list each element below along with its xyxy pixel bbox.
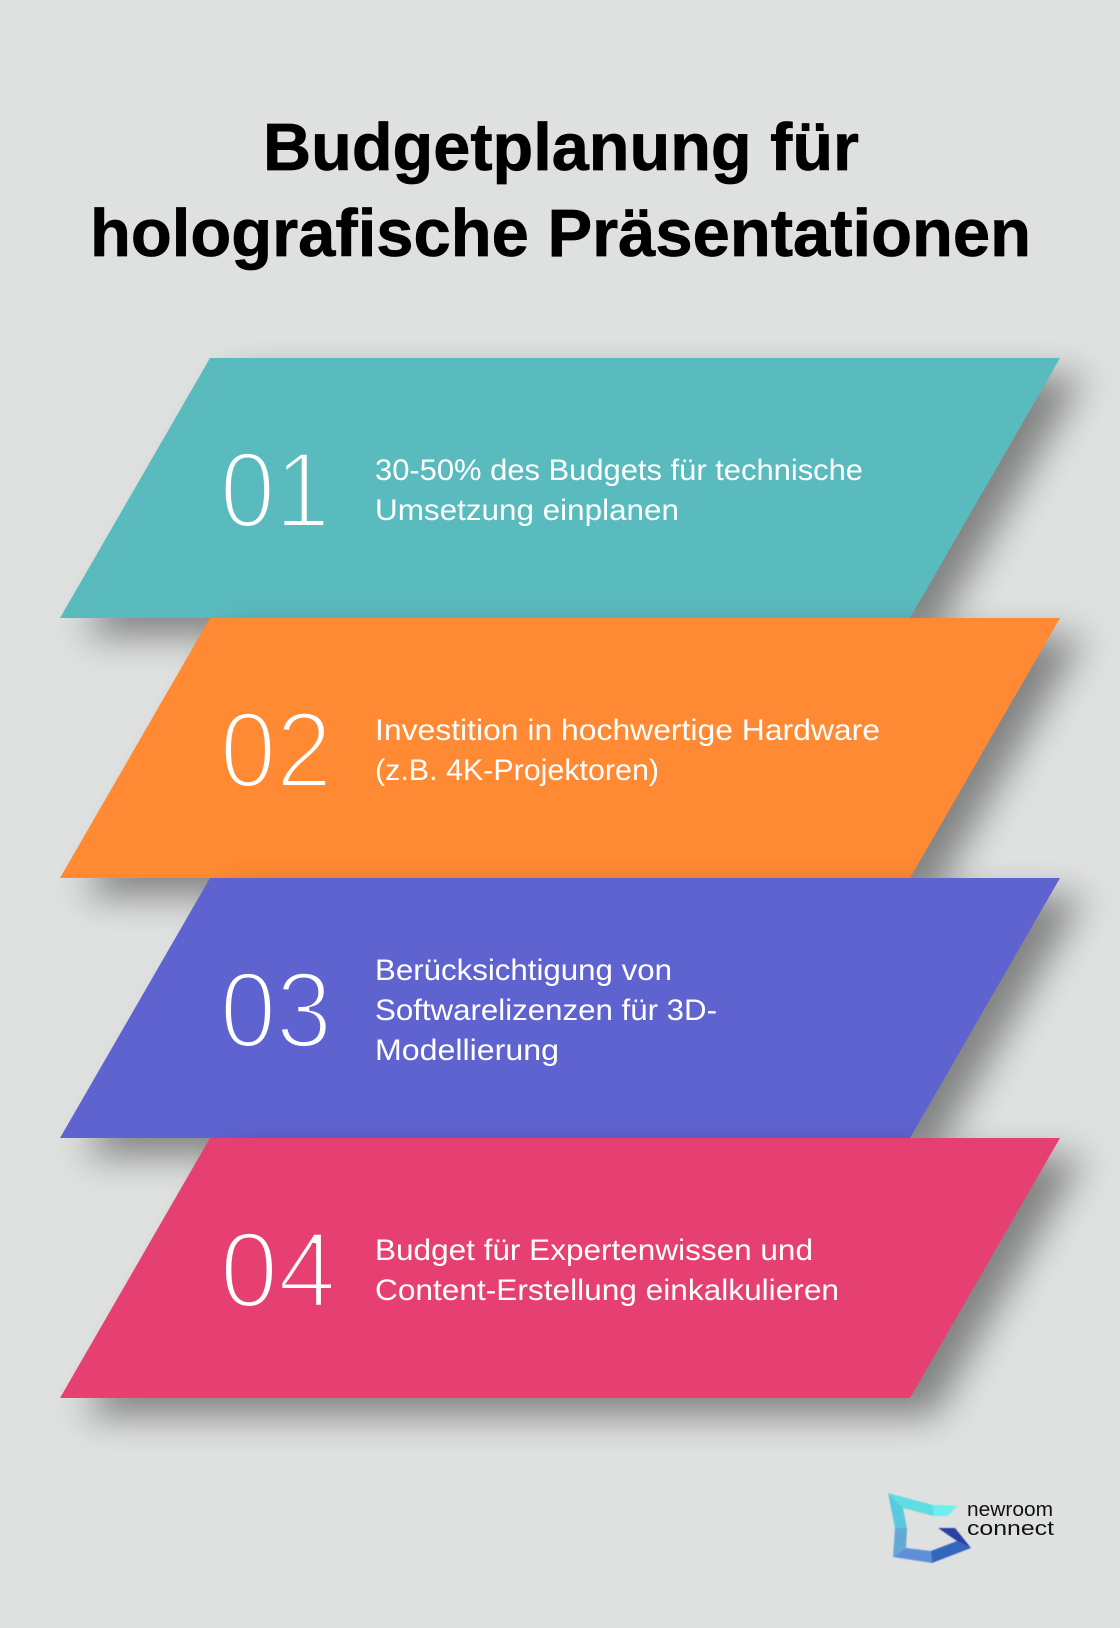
step 01 text: Umsetzung einplanen (375, 494, 679, 527)
logo: newroom connect (888, 1493, 1055, 1563)
icon: logo mark (888, 1493, 971, 1563)
step 02 text (375, 714, 880, 787)
title: holografische Präsentationen (90, 196, 1031, 271)
step 02 text: Investition in hochwertige Hardware (375, 714, 880, 747)
step 04 text: Budget für Expertenwissen und (375, 1234, 813, 1267)
step 04 parallelogram (60, 1138, 1060, 1398)
step 04 text: Content-Erstellung einkalkulieren (375, 1274, 839, 1307)
step 04 text (375, 1234, 839, 1307)
panel: step 01 (60, 358, 1060, 618)
step 02 text: (z.B. 4K-Projektoren) (375, 754, 659, 787)
panel: step 03 (60, 878, 1060, 1138)
step 03 text: Modellierung (375, 1034, 559, 1067)
panel: step 02 (60, 618, 1060, 878)
step 03 text (375, 954, 717, 1067)
panel: step 04 (60, 1138, 1060, 1398)
title (90, 110, 1031, 271)
step 03 parallelogram (60, 878, 1060, 1138)
step 02 parallelogram (60, 618, 1060, 878)
step 04 number: 04 (220, 1209, 336, 1330)
step 03 text: Berücksichtigung von (375, 954, 672, 987)
logo wordmark: newroom (967, 1499, 1053, 1521)
title: Budgetplanung für (263, 110, 859, 185)
logo wordmark (967, 1499, 1055, 1540)
step 01 text (375, 454, 863, 527)
step 01 parallelogram (60, 358, 1060, 618)
step 03 number: 03 (220, 949, 332, 1070)
step 03 text: Softwarelizenzen für 3D- (375, 994, 717, 1027)
logo wordmark: connect (967, 1518, 1055, 1540)
step 02 number: 02 (220, 689, 332, 810)
step 01 number: 01 (220, 429, 330, 550)
step 01 text: 30-50% des Budgets für technische (375, 454, 863, 487)
